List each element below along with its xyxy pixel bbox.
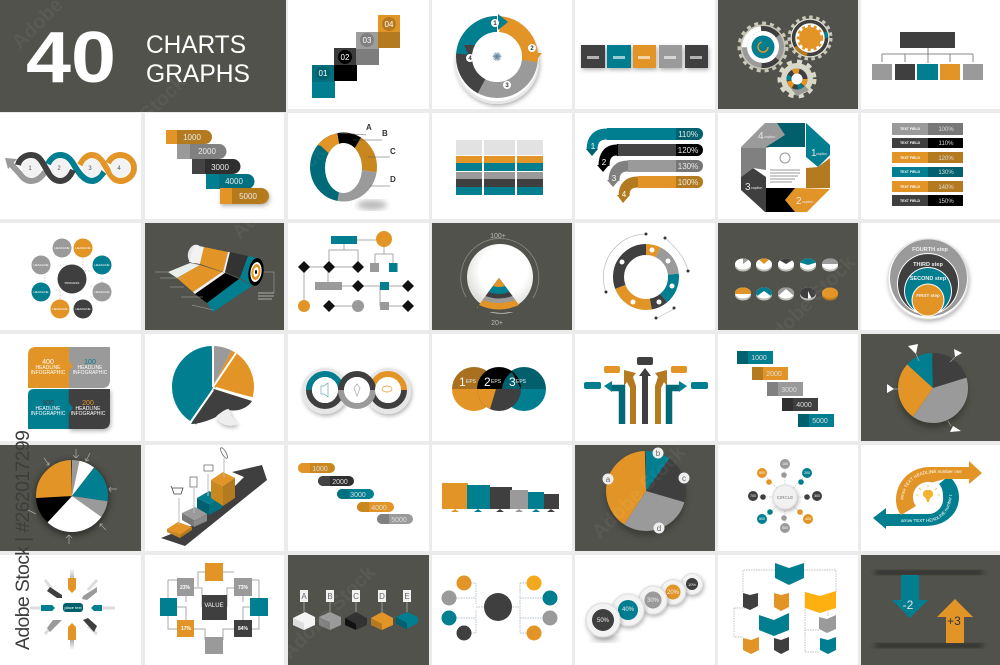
chart: value block diagram: 73%	[238, 585, 249, 591]
chart: snake timeline: 4	[117, 166, 121, 172]
chart: curved arrow bars: 120%	[678, 146, 698, 155]
chart: descending pills: 5000	[391, 517, 407, 524]
chart: octagon process: caption	[816, 152, 827, 156]
chart: nested step circles: FOURTH step	[912, 247, 949, 253]
chart: curved arrow bars: 1	[591, 142, 596, 151]
chart: radial node diagram	[748, 459, 822, 533]
chart: ascending steps: 03	[363, 36, 372, 45]
chart: curved arrow bars: 100%	[678, 178, 698, 187]
chart: isometric growth bars	[161, 447, 267, 546]
chart: descending pills: 1000	[312, 466, 328, 473]
chart: four quadrant tiles: INFOGRAPHIC	[73, 370, 108, 376]
chart: 3D ring with callouts: A	[366, 123, 372, 132]
chart: circular four step cycle: 4	[468, 56, 472, 62]
chart: rising level circles: 30%	[647, 598, 660, 604]
decorative watermarks: Adobe Stock	[88, 71, 191, 174]
chart: radial node diagram: 100	[782, 462, 788, 466]
chart: curved arrow bars: 3	[612, 174, 617, 183]
chart: rising level circles: 10%	[688, 582, 696, 587]
chart: descending column steps	[442, 483, 559, 512]
chart: octagon process: caption	[751, 186, 762, 190]
title: 40	[26, 18, 116, 98]
chart: octagon process: caption	[802, 200, 813, 204]
title	[26, 18, 250, 98]
text: vertical stock credit: Adobe Stock | #262017299	[12, 430, 34, 650]
chart: four quadrant tiles: HEADLINE	[75, 406, 101, 412]
chart: ten disc fractions	[733, 258, 840, 300]
chart: table of five rows	[456, 140, 543, 195]
chart: radial node diagram: CIRCLE	[777, 495, 793, 500]
chart: descending pills	[298, 463, 413, 524]
chart: three linked rings	[305, 371, 408, 411]
chart: S-shaped double arrow: arrow TEXT HEADLINE number one	[900, 470, 962, 500]
chart: descending pills: 3000	[350, 492, 366, 499]
chart: stacked percentage rows: TEXT FIELD	[900, 156, 920, 160]
chart: four quadrant tiles: 200	[82, 400, 94, 407]
chart: hub and eight satellites: HEADLINE	[33, 263, 49, 267]
chart: three overlapping circles: EPS	[466, 379, 477, 385]
chart: pie with stacked wedge: 100+	[490, 233, 506, 240]
decorative watermarks: Adobe Stock	[228, 141, 331, 244]
chart: hub and eight satellites: HEADLINE	[52, 307, 68, 311]
chart: value block diagram	[160, 563, 268, 654]
chart: up and down arrows: +3	[947, 614, 961, 628]
chart: radial node diagram: 400	[805, 517, 811, 521]
chart: four quadrant tiles	[28, 347, 110, 429]
chart: dark pie labelled a to d	[602, 448, 690, 536]
chart: ribbon flow	[734, 563, 836, 654]
chart: ascending steps	[312, 15, 400, 98]
chart: snake timeline: 2	[57, 166, 61, 172]
chart: 3D ring with callouts: B	[382, 129, 388, 138]
chart: 3D ring with callouts: D	[390, 175, 396, 184]
chart: 3D ring with callouts	[310, 124, 396, 211]
chart: five 3D boxes with cards: E	[404, 592, 410, 601]
chart: three gears	[739, 17, 831, 96]
chart: three overlapping circles: 3	[509, 375, 516, 389]
chart: rising level circles	[586, 574, 702, 642]
chart: three overlapping circles: 1	[459, 375, 466, 389]
decorative watermarks: Adobe Stock	[758, 251, 861, 354]
chart: ascending steps: 04	[385, 20, 394, 29]
chart: descending pills: 2000	[332, 479, 348, 486]
chart: radial node diagram: 500	[782, 526, 788, 530]
chart: staggered tab labels: 2000	[198, 147, 216, 156]
decorative watermarks: Adobe Stock	[588, 441, 691, 544]
chart: radial node diagram: 300	[814, 494, 820, 498]
title: GRAPHS	[146, 60, 250, 88]
chart: ascending steps: 01	[319, 69, 328, 78]
chart: circular four step cycle: 3	[505, 83, 509, 89]
chart: four quadrant tiles: 300	[42, 400, 54, 407]
chart: octagon process: 3	[745, 182, 751, 193]
chart: stacked percentage rows	[892, 123, 963, 206]
chart: hub and eight satellites	[32, 238, 112, 318]
chart: hub and eight satellites: HEADLINE	[33, 290, 49, 294]
chart: stacked percentage rows: 130%	[938, 170, 954, 176]
chart: circular four step cycle: 2	[530, 46, 534, 52]
chart: pie with stacked wedge	[461, 233, 539, 327]
chart: S-shaped double arrow: arrow TEXT HEADLINE number two	[901, 494, 952, 522]
chart: curved arrow bars: 2	[602, 158, 607, 167]
chart: radial arrows around pill: place text	[64, 605, 82, 610]
chart: flow chart with diamonds	[298, 231, 414, 312]
chart: hub and eight satellites: HEADLINE	[54, 246, 70, 250]
chart: stacked percentage rows: 100%	[938, 127, 954, 133]
chart: up and down arrows: -2	[903, 598, 914, 612]
chart: radial node diagram: 200	[804, 471, 810, 475]
chart: stacked percentage rows: TEXT FIELD	[900, 185, 920, 189]
chart: dark pie with inward arrows	[28, 449, 117, 544]
chart: stacked percentage rows: TEXT FIELD	[900, 170, 920, 174]
chart: octagon process	[741, 123, 830, 212]
chart: three overlapping circles: EPS	[516, 379, 527, 385]
chart: staggered tab labels: 4000	[225, 177, 243, 186]
title: CHARTS	[146, 31, 246, 59]
chart: circular four step cycle: 1	[493, 21, 497, 27]
chart: three overlapping circles: EPS	[491, 379, 502, 385]
chart: pie with curled slice	[190, 346, 256, 426]
chart: pie with stacked wedge: 20+	[491, 320, 503, 327]
chart: dark pie labelled a to d: d	[657, 524, 661, 533]
chart: octagon process: caption	[764, 135, 775, 139]
chart: up and down arrows	[875, 570, 983, 648]
chart: radial node diagram: 600	[759, 517, 765, 521]
chart: hub and eight satellites: HEADLINE	[94, 263, 110, 267]
chart: octagon process: 2	[796, 196, 802, 207]
chart: four quadrant tiles: INFOGRAPHIC	[31, 411, 66, 417]
chart: value block diagram: 84%	[238, 626, 249, 632]
chart: dark pie labelled a to d: b	[656, 449, 661, 458]
chart: descending pills: 4000	[371, 505, 387, 512]
chart: hub and eight satellites: HEADLINE	[75, 307, 91, 311]
chart: octagon process: 1	[811, 148, 817, 159]
chart: value block diagram: 23%	[180, 585, 191, 591]
chart: dark pie labelled a to d: a	[606, 475, 611, 484]
chart: value block diagram: VALUE	[204, 603, 224, 609]
chart: hub and eight satellites: HEADLINE	[94, 290, 110, 294]
chart: descending labelled tags: 2000	[766, 371, 782, 378]
chart: curved arrow bars: 4	[622, 190, 627, 199]
chart: staggered tab labels: 3000	[211, 163, 229, 172]
chart: five 3D boxes with cards	[293, 590, 418, 630]
chart: descending labelled tags: 1000	[751, 355, 767, 362]
chart: snake timeline: 1	[28, 166, 32, 172]
chart: three overlapping circles	[452, 367, 546, 411]
chart: snake timeline: 3	[88, 166, 92, 172]
chart: pie with white markers	[887, 344, 968, 432]
chart: three overlapping circles: 2	[484, 375, 491, 389]
chart: staggered tab labels: 5000	[239, 192, 257, 201]
chart: descending labelled tags: 5000	[812, 418, 828, 425]
chart: staggered tab labels: 1000	[183, 133, 201, 142]
chart: five 3D boxes with cards: A	[301, 592, 307, 601]
chart: curved arrow bars: 130%	[678, 162, 698, 171]
chart: descending labelled tags	[737, 351, 834, 427]
chart: nested step circles: FIRST step	[916, 293, 940, 298]
chart: descending labelled tags: 4000	[796, 402, 812, 409]
chart: four quadrant tiles: INFOGRAPHIC	[31, 370, 66, 376]
chart: descending labelled tags: 3000	[781, 387, 797, 394]
chart: staggered tab labels	[166, 130, 269, 204]
chart: diverging arrows	[584, 357, 708, 424]
chart: five 3D boxes with cards: B	[327, 592, 333, 601]
chart: curved arrow bars	[586, 128, 703, 203]
chart: five 3D boxes with cards: C	[353, 592, 359, 601]
chart: nested step circles	[888, 239, 968, 319]
decorative watermarks: Adobe Stock	[548, 61, 651, 164]
chart: stacked percentage rows: 110%	[939, 141, 954, 147]
chart: radial node diagram: 700	[750, 494, 756, 498]
chart: four quadrant tiles: INFOGRAPHIC	[71, 411, 106, 417]
chart: stacked percentage rows: TEXT FIELD	[900, 199, 920, 203]
chart: circular four step cycle	[455, 14, 542, 104]
chart: radial arrows around pill	[30, 568, 115, 650]
chart: four quadrant tiles: HEADLINE	[77, 365, 103, 371]
chart: four quadrant tiles: HEADLINE	[35, 406, 61, 412]
decorative watermarks: Adobe Stock	[278, 561, 381, 664]
chart: rising level circles: 40%	[622, 607, 635, 613]
chart: octagon process: 4	[758, 131, 764, 142]
chart: nested step circles: THIRD step	[913, 262, 943, 268]
chart: curved arrow bars: 110%	[678, 130, 698, 139]
chart: unrolling carpet	[155, 243, 274, 312]
chart: hub and eight satellites: HEADLINE	[75, 246, 91, 250]
chart: S-shaped double arrow	[873, 461, 982, 529]
chart: four quadrant tiles: HEADLINE	[35, 365, 61, 371]
chart: labelled donut	[603, 232, 690, 320]
chart: dark pie labelled a to d: c	[682, 474, 686, 483]
chart: nested step circles: SECOND step	[910, 276, 947, 282]
chart: stacked percentage rows: TEXT FIELD	[900, 127, 920, 131]
chart: stacked percentage rows: 150%	[938, 199, 954, 205]
chart: five 3D boxes with cards: D	[379, 592, 385, 601]
chart: ascending steps: 02	[341, 53, 350, 62]
chart: five square tiles	[581, 45, 708, 68]
chart: stacked percentage rows: 140%	[938, 185, 954, 191]
chart: circular four step cycle: ✺	[492, 50, 502, 64]
chart: 3D ring with callouts: C	[390, 147, 396, 156]
chart: hub and eight satellites: PROCESS	[65, 281, 79, 285]
chart: stacked percentage rows: TEXT FIELD	[900, 141, 920, 145]
chart: value block diagram: 17%	[181, 626, 192, 632]
chart: stacked percentage rows: 120%	[938, 156, 954, 162]
chart: four quadrant tiles: 100	[84, 359, 96, 366]
chart: snake timeline	[5, 155, 134, 181]
chart: circle tree	[442, 576, 558, 640]
chart: rising level circles: 50%	[597, 618, 610, 624]
chart: radial node diagram: 800	[759, 471, 765, 475]
chart: four quadrant tiles: 400	[42, 359, 54, 366]
chart: rising level circles: 20%	[667, 590, 680, 596]
chart: org chart	[872, 32, 983, 80]
